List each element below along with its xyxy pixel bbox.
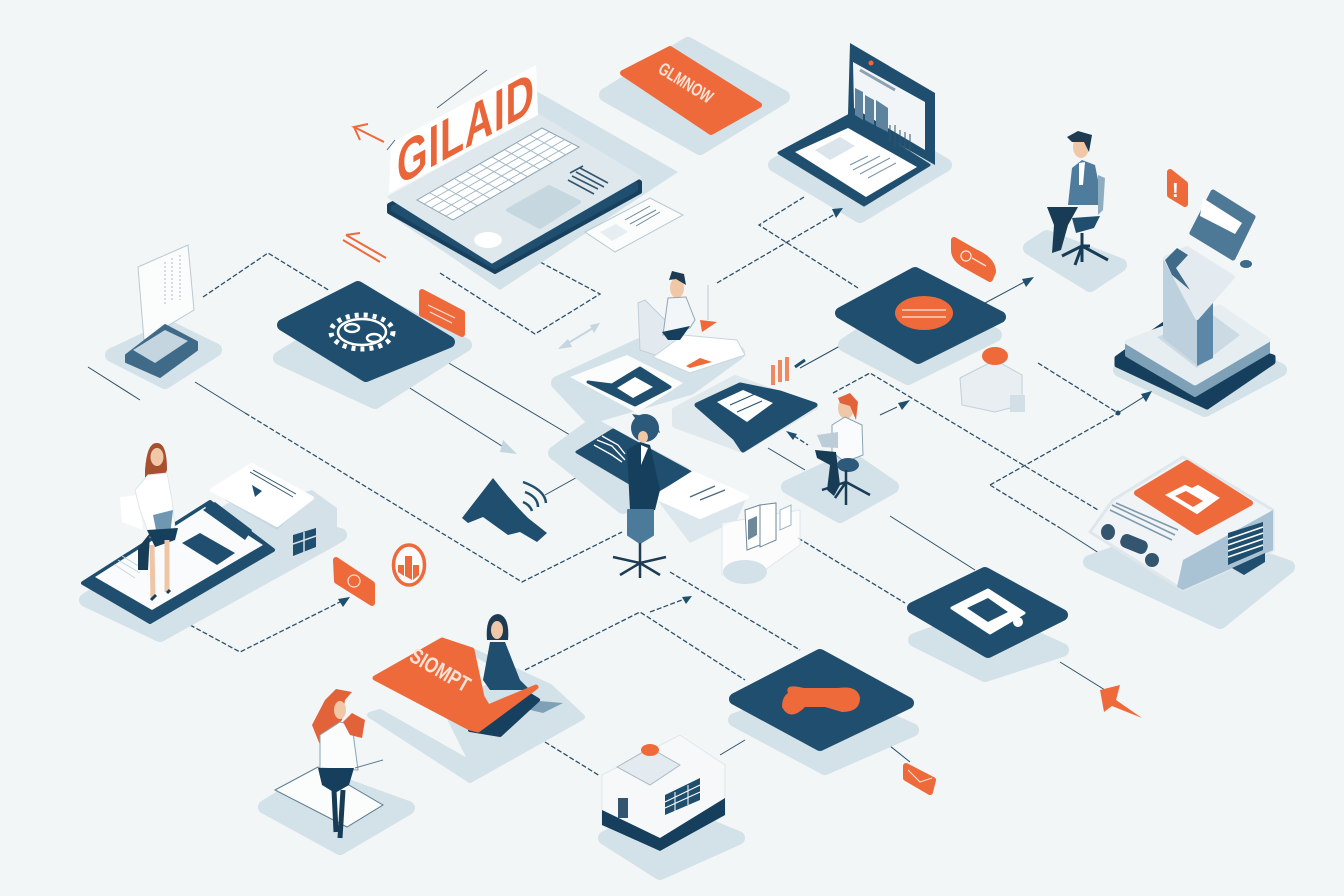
panel: orange button GLMNOW: GLMNOW [655,59,716,108]
panel: laptop with GILAID screen [387,59,678,290]
icon: device [952,590,1024,633]
figure: seated woman at center [638,271,745,373]
panel: orange laptop SIOMPT [370,614,582,780]
screen with label [389,65,538,193]
figure: center standing woman in chair [613,414,666,578]
orange arrow lower right [1100,685,1142,718]
icon: orange bone [782,686,860,714]
figure: seated man right of center [788,393,892,516]
panel: orange button GLMNOW [606,44,783,148]
center scene tiles [558,271,745,417]
panel: laptop with GILAID screen: GILAID [397,59,535,199]
printer left top [112,245,215,382]
icon: orange alert tag: ! [1172,180,1179,202]
icon: orange alert tag [1170,172,1185,204]
printer [245,490,337,578]
figure: woman [120,443,178,600]
icon: megaphone silhouette [462,478,547,542]
panel: navy tile with gear [280,287,465,402]
orange envelope tag [906,766,933,792]
trackpad [508,187,579,227]
figure: woman with red hair bottom left [265,689,408,848]
orange tag right of gear [422,292,462,334]
figure: woman with laptop [483,614,530,690]
panel: top laptop [775,43,945,216]
panel: navy tile with device icon [913,573,1062,675]
panel: left tablet and printer with woman [83,443,340,635]
arrows left orange [343,124,386,262]
icon: gear [331,315,393,349]
center desk tile [675,357,815,450]
light arrows [500,323,600,454]
panel: glass document display [722,503,800,584]
panel: white desk [655,473,747,543]
column [1163,260,1197,365]
figure: seated man top right [1030,131,1120,285]
screen [1192,192,1253,258]
panel: projector right [1090,457,1288,622]
panel: navy tile with orange minus icon [841,273,1000,378]
capsule with orange cap [960,347,1025,412]
orange shield tag [336,560,372,603]
icon: orange circle [895,296,953,330]
panel: machine top right [1117,192,1280,410]
orange key tag [954,240,993,279]
panel: navy tile with orange bone icon [735,655,912,768]
shadow and navy tile behind center figure [555,425,690,507]
connector lines [88,197,1150,776]
mini bar chart [771,357,789,385]
arrowheads [338,208,1152,607]
keyboard [417,128,579,220]
icon: orange circle chart [394,545,424,585]
panel: orange laptop SIOMPT: SIOMPT [405,644,474,698]
document sheet [585,198,683,252]
dashboard chart [855,88,888,132]
panel: bottom machine [602,735,738,873]
